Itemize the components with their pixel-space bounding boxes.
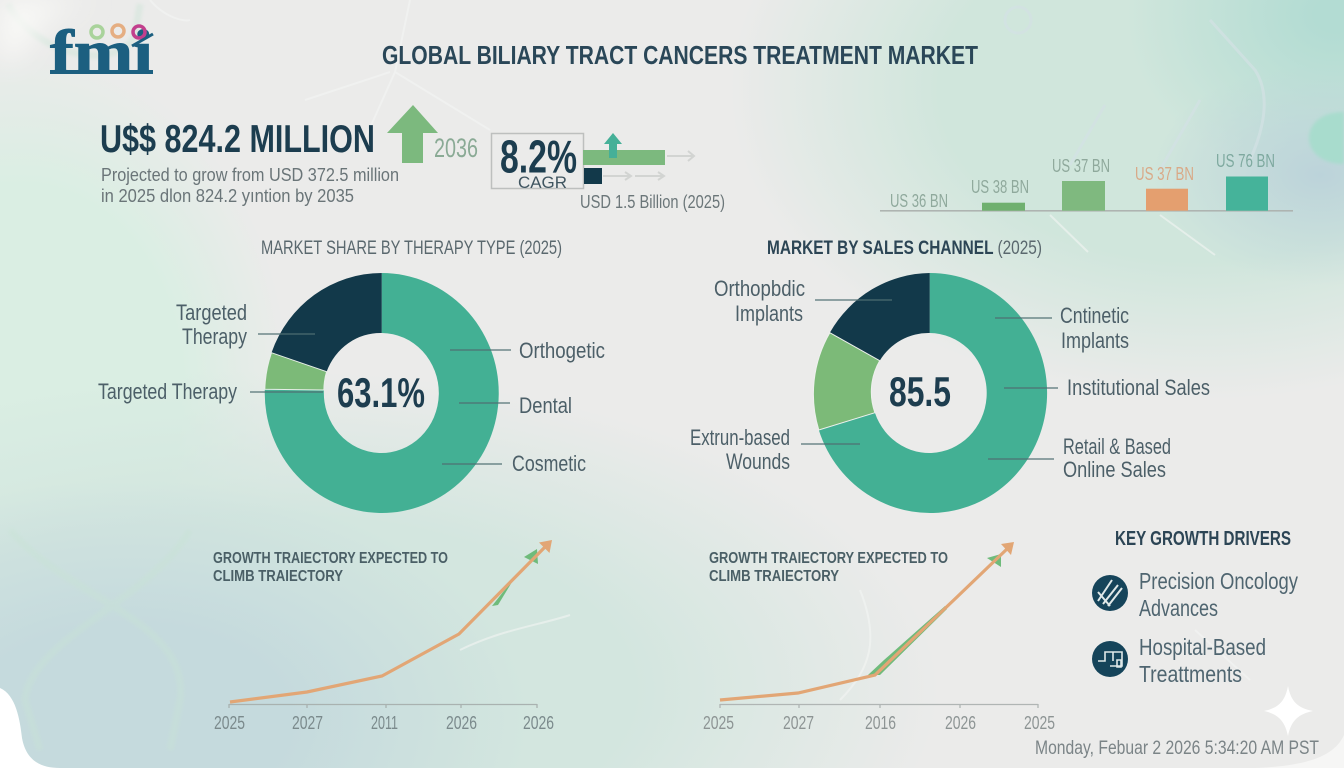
panel: key growth drivers: Treattments bbox=[1139, 661, 1242, 687]
bar chart: market values: US 38 BN bbox=[971, 176, 1029, 197]
donut chart: sales channel: Wounds bbox=[726, 449, 790, 474]
CAGR mini bars bbox=[583, 133, 694, 184]
line chart: right growth trajectory: GROWTH TRAIECTORY EXPECTED TO bbox=[709, 550, 948, 567]
CAGR box: CAGR bbox=[518, 174, 567, 192]
headline value: U$$ 824.2 MILLION bbox=[100, 118, 375, 161]
line chart: right growth trajectory: 2025 bbox=[1024, 713, 1055, 733]
line chart: left growth trajectory bbox=[213, 540, 554, 733]
line chart: left growth trajectory: 2027 bbox=[292, 713, 323, 733]
donut chart: therapy type bbox=[98, 273, 605, 513]
bar chart: market values bbox=[880, 150, 1293, 212]
donut chart: therapy type: Dental bbox=[519, 393, 572, 418]
panel: key growth drivers: Precision Oncology bbox=[1139, 568, 1298, 594]
bar chart: market values: US 37 BN bbox=[1135, 163, 1194, 184]
donut chart: therapy type: Targeted Therapy bbox=[98, 379, 237, 404]
line chart: left growth trajectory: 2011 bbox=[371, 713, 398, 733]
donut chart: therapy type: Therapy bbox=[182, 324, 247, 349]
panel: key growth drivers bbox=[1092, 527, 1298, 687]
line chart: right growth trajectory: 2026 bbox=[945, 713, 976, 733]
headline value bbox=[100, 118, 399, 206]
donut chart: sales channel: Extrun-based bbox=[690, 425, 790, 450]
title: GLOBAL BILIARY TRACT CANCERS TREATMENT MARKET bbox=[382, 40, 978, 70]
donut chart: sales channel: Institutional Sales bbox=[1067, 375, 1210, 400]
donut chart: therapy type: Targeted bbox=[176, 300, 247, 325]
line chart: left growth trajectory: 2025 bbox=[214, 713, 245, 733]
line chart: right growth trajectory: 2027 bbox=[783, 713, 814, 733]
donut chart: sales channel: Retail & Based bbox=[1063, 434, 1171, 459]
donut chart: sales channel: Cntinetic bbox=[1060, 303, 1129, 328]
donut chart: therapy type: Cosmetic bbox=[512, 451, 586, 476]
donut chart: sales channel: 85.5 bbox=[889, 368, 951, 415]
bar chart: market values: US 76 BN bbox=[1216, 150, 1275, 171]
logo: fmi: fmi bbox=[50, 19, 153, 87]
line chart: right growth trajectory: 2016 bbox=[865, 713, 896, 733]
donut chart: sales channel: Online Sales bbox=[1063, 457, 1166, 482]
donut chart: sales channel: Implants bbox=[735, 301, 803, 326]
description bbox=[101, 165, 399, 206]
donut chart: sales channel: Implants bbox=[1061, 328, 1129, 353]
line chart: left growth trajectory: 2026 bbox=[446, 713, 477, 733]
icon: sparkle star bbox=[1264, 686, 1313, 736]
icon: hospital treatments bbox=[1092, 641, 1128, 677]
heading: therapy type: MARKET SHARE BY THERAPY TYPE (2025) bbox=[261, 238, 562, 259]
base value: USD 1.5 Billion (2025) bbox=[580, 192, 725, 212]
CAGR box bbox=[492, 130, 584, 192]
line chart: right growth trajectory: CLIMB TRAIECTORY bbox=[709, 568, 839, 585]
line chart: left growth trajectory: CLIMB TRAIECTORY bbox=[213, 568, 343, 585]
line chart: left growth trajectory: 2026 bbox=[523, 713, 554, 733]
heading: sales channel: MARKET BY SALES CHANNEL (2025) bbox=[767, 238, 1042, 259]
panel: key growth drivers: Hospital-Based bbox=[1139, 634, 1266, 660]
icon: growth arrow bbox=[387, 105, 438, 163]
line chart: right growth trajectory bbox=[703, 542, 1055, 733]
year label: 2036 bbox=[434, 133, 478, 163]
donut chart: therapy type: Orthogetic bbox=[519, 338, 605, 363]
icon: precision oncology bbox=[1092, 575, 1128, 611]
donut chart: sales channel bbox=[690, 273, 1210, 513]
description: in 2025 dlon 824.2 yıntion by 2035 bbox=[101, 186, 354, 206]
description: Projected to grow from USD 372.5 million bbox=[101, 165, 399, 185]
donut chart: sales channel: Orthopbdic bbox=[714, 276, 805, 301]
bar chart: market values: US 37 BN bbox=[1052, 155, 1110, 176]
bar chart: market values: US 36 BN bbox=[890, 190, 948, 211]
line chart: right growth trajectory: 2025 bbox=[703, 713, 734, 733]
donut chart: therapy type: 63.1% bbox=[337, 369, 425, 416]
CAGR box: 8.2% bbox=[500, 130, 577, 182]
line chart: left growth trajectory: GROWTH TRAIECTORY EXPECTED TO bbox=[213, 550, 448, 567]
panel: key growth drivers: Advances bbox=[1139, 595, 1218, 621]
